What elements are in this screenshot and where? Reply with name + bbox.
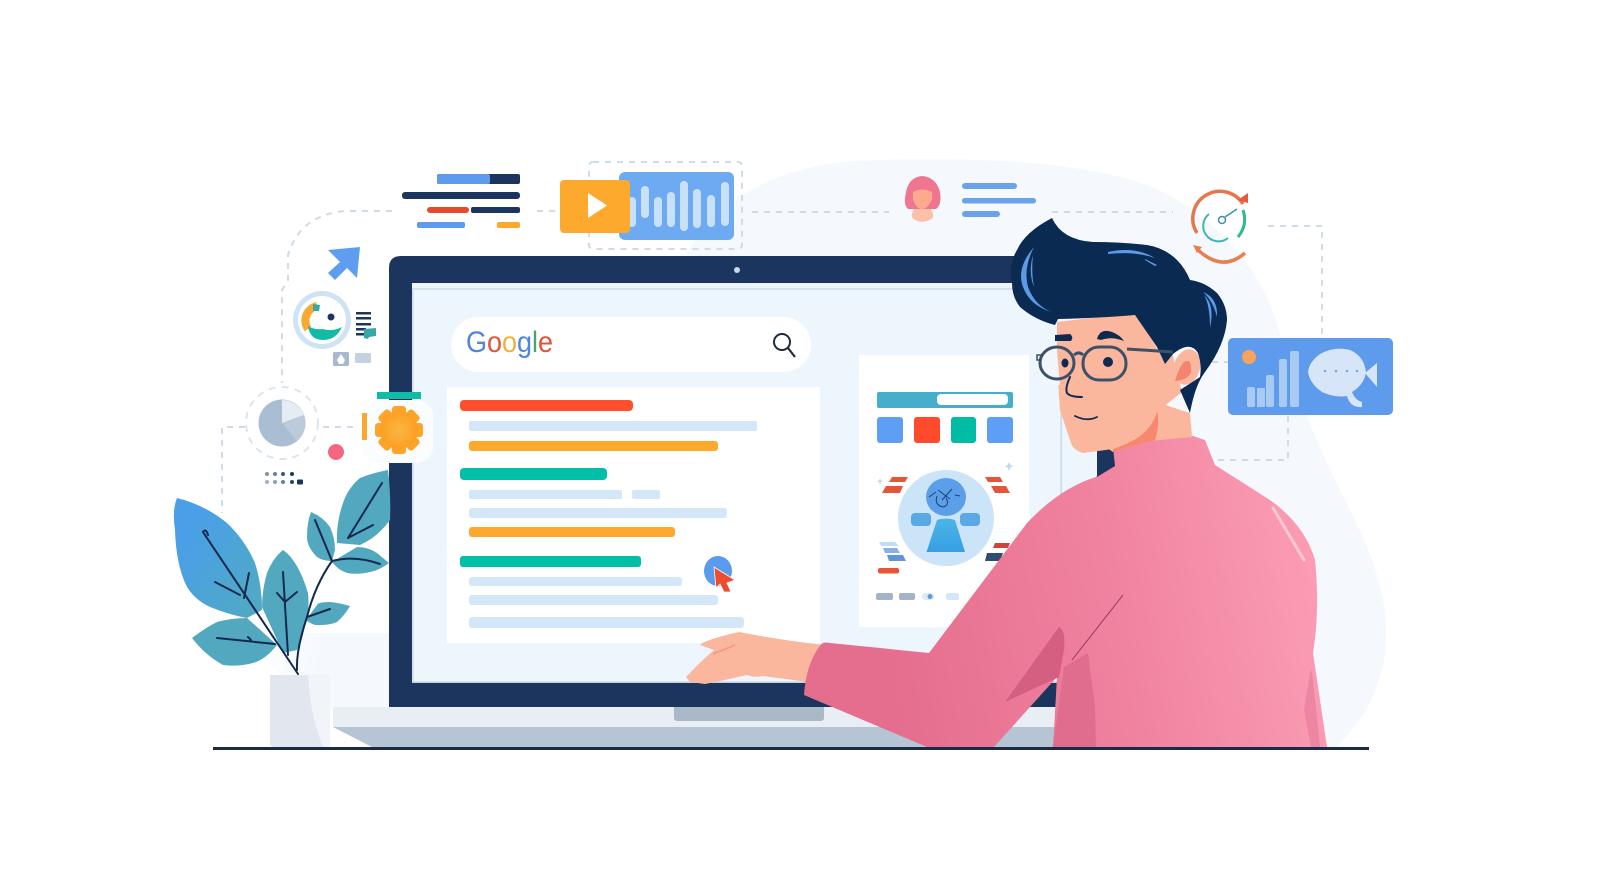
glasses [1037,347,1173,380]
arrow icon [328,247,360,280]
plant backdrop [250,633,390,708]
gear settings card [362,392,433,463]
person [686,218,1327,747]
pie chart icon [246,387,318,459]
side profile panel [859,355,1029,627]
shirt [804,435,1327,747]
nose [1066,377,1082,397]
ground line [213,747,1369,750]
plant pot [270,675,330,747]
leaves [174,470,390,666]
stems [203,483,382,674]
video and audio card [560,172,734,240]
dashed connector lines [222,162,1322,513]
mouth [1075,416,1097,419]
list lines icon [333,312,376,366]
woman avatar with text lines [905,176,1036,222]
floating text bars [402,174,520,228]
Google logo text: Google [466,326,553,359]
chat and chart card [1228,338,1393,415]
refresh gauge icon [1193,191,1248,262]
laptop screen [389,256,1113,707]
ear [1170,346,1204,388]
background blob [687,159,1386,748]
dot matrix legend [265,472,303,484]
plant [174,470,390,747]
hair [1011,218,1227,413]
collar [1097,447,1115,477]
hair highlights [1021,247,1217,328]
click cursor [704,556,735,592]
hand [686,632,824,684]
search results panel [447,387,820,643]
search bar [451,317,811,372]
donut chart icon [293,291,351,349]
magnifier icon [774,334,795,357]
eyes [1062,357,1113,368]
laptop base [333,707,1063,747]
pink dot [328,444,344,460]
neck and face [1042,313,1204,453]
eyebrows [1055,331,1124,341]
